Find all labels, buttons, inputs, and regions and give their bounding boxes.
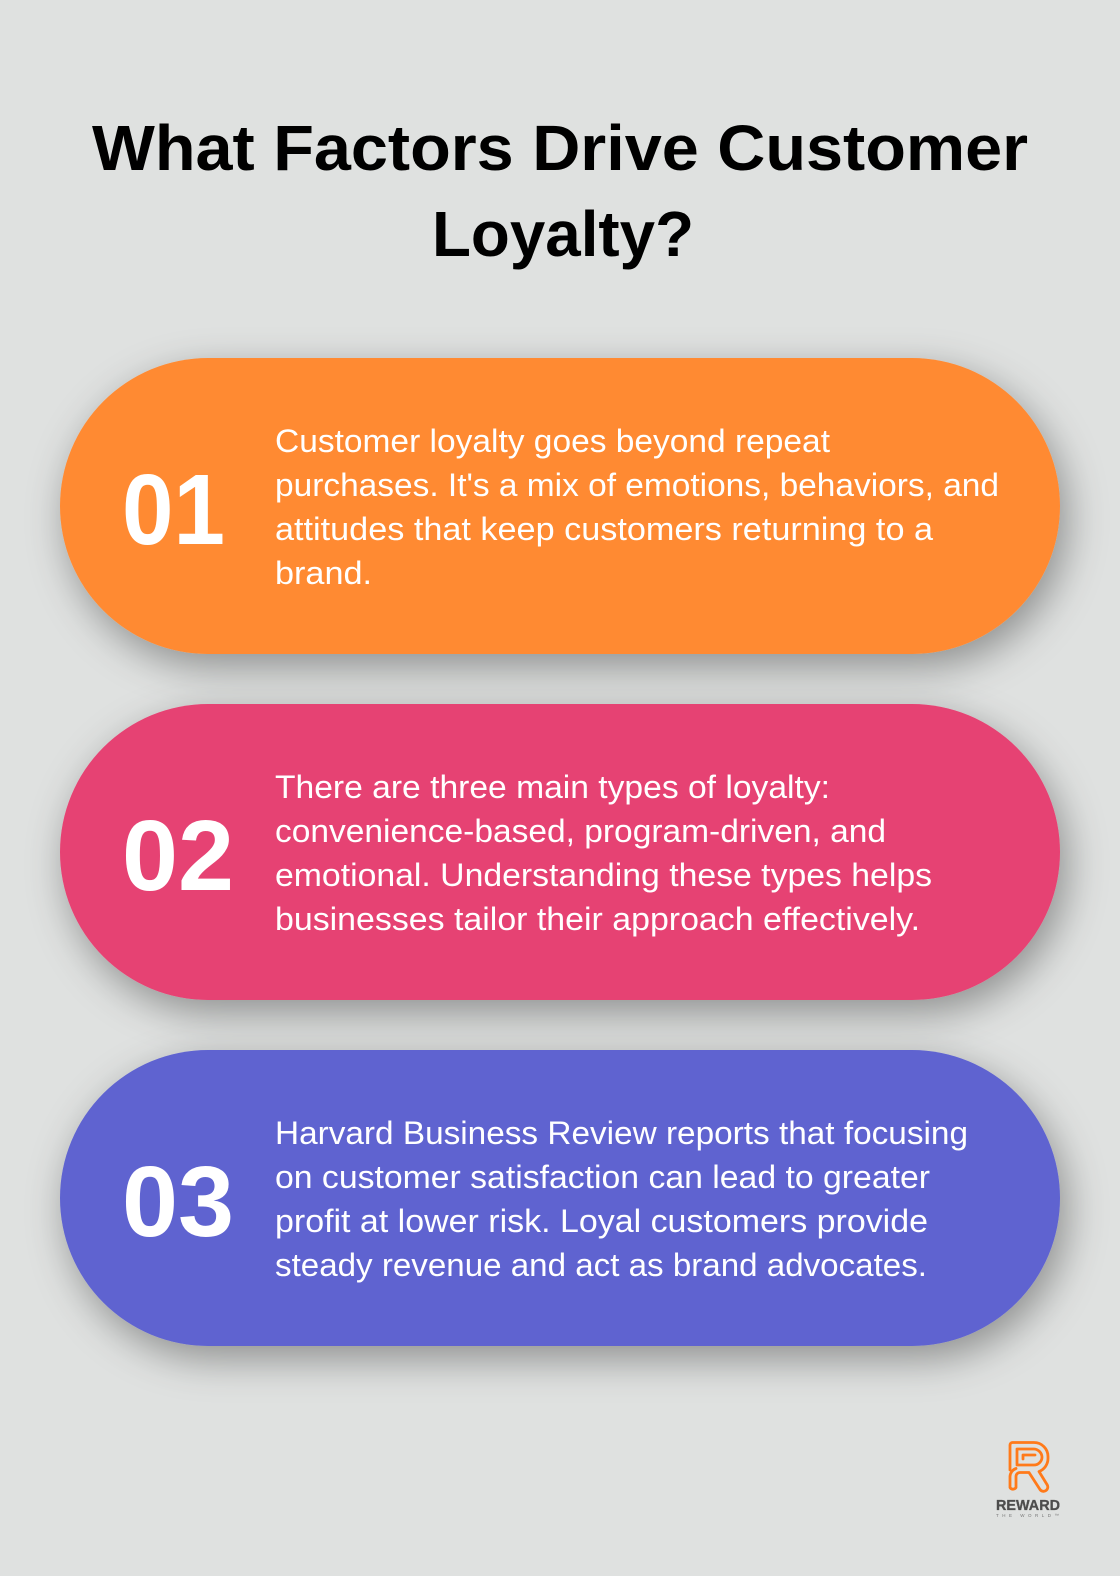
text block: step 03: profit at lower risk. Loyal customers provide <box>275 1203 928 1239</box>
text block: step 02: emotional. Understanding these types helps <box>275 857 932 893</box>
tagline: THE WORLD™ <box>996 1513 1059 1518</box>
logo: Reward the World <box>996 1442 1060 1518</box>
panel: step 02 <box>60 704 1060 1000</box>
wordmark: REWARD <box>996 1497 1060 1514</box>
text block: step 01 <box>275 423 999 591</box>
title: What Factors Drive Customer <box>92 112 1028 184</box>
text block: step 02 <box>275 769 932 937</box>
text block: step 03: on customer satisfaction can lead to greater <box>275 1159 930 1195</box>
text block: step 01: attitudes that keep customers returning to a <box>275 511 933 547</box>
text block: step 02: businesses tailor their approach effectively. <box>275 901 920 937</box>
number 03: 03 <box>122 1146 234 1258</box>
text block: step 01: Customer loyalty goes beyond repeat <box>275 423 830 459</box>
text block: step 02: There are three main types of loyalty: <box>275 769 830 805</box>
text block: step 03: Harvard Business Review reports that focusing <box>275 1115 968 1151</box>
title: Loyalty? <box>432 198 694 270</box>
title <box>92 112 1028 270</box>
text block: step 03 <box>275 1115 968 1283</box>
panel: step 03 <box>60 1050 1060 1346</box>
text block: step 01: brand. <box>275 555 372 591</box>
icon: R mark <box>1010 1442 1048 1491</box>
number 02: 02 <box>122 800 234 912</box>
text block: step 02: convenience-based, program-driven, and <box>275 813 886 849</box>
text block: step 03: steady revenue and act as brand advocates. <box>275 1247 927 1283</box>
panel: step 01 <box>60 358 1060 654</box>
number 01: 01 <box>122 454 225 566</box>
text block: step 01: purchases. It's a mix of emotions, behaviors, and <box>275 467 999 503</box>
